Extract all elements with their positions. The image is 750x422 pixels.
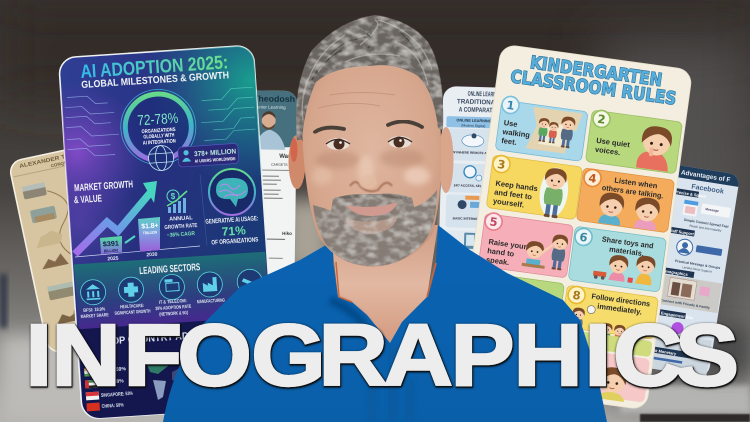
rule 2: quiet voices: Use quiet: [596, 136, 631, 149]
market chart: TRILLION: [143, 230, 157, 235]
card body text: [258, 153, 293, 260]
panel: kindergarten classroom rules card: [455, 44, 693, 410]
parchment title: ALEXANDER THE GREAT: [19, 147, 99, 170]
users stat pill: [178, 143, 239, 167]
feature: engagement: [637, 307, 716, 377]
heading: CLASSROOM RULES: [509, 67, 677, 110]
nose: [350, 175, 392, 191]
rule 4: listen: 4: [588, 171, 597, 186]
rule 6: share toys: materials.: [609, 245, 644, 258]
feature: staff support: Staff Support: [668, 228, 695, 237]
market growth heading: MARKET GROWTH: [74, 179, 133, 194]
column header: [446, 116, 517, 129]
face: [302, 62, 441, 267]
rule 1: walking feet: feet.: [501, 136, 517, 147]
divider line: [200, 174, 207, 246]
heading: AI ADOPTION 2025:: [80, 52, 229, 83]
feature: staff support: Practical Message & Groups: [675, 259, 721, 270]
panel: corporate training infographic card behind: Senior Learning: [254, 104, 286, 110]
year labels: 2025: [107, 256, 119, 262]
feature: engagement: Trust Monetary: [647, 347, 677, 356]
rule 2: quiet voices: voices.: [594, 145, 621, 157]
icon: factory: [197, 271, 223, 298]
adoption ring stat: 72-78%: [137, 111, 179, 129]
icon: brain: [209, 169, 255, 215]
rule 4: listen: Listen when: [614, 176, 658, 190]
icon: globe: [148, 145, 174, 171]
panel: corporate training infographic card behind: [222, 90, 297, 281]
mouth: [346, 202, 398, 216]
feature: speed: Reach and Info Instantly: [689, 224, 722, 233]
rule 2: quiet voices: 2: [597, 112, 606, 127]
sector labels: MARKET SHARE: [81, 312, 109, 320]
generative AI stat: [205, 215, 259, 247]
rule 1: walking feet: Use: [503, 118, 518, 129]
eyebrows: [315, 121, 422, 132]
lower panels: [463, 316, 653, 405]
row: interaction: [445, 194, 510, 229]
rule 3: hands to yourself: Keep hands: [495, 179, 538, 193]
generative AI stat: 71%: [221, 223, 247, 239]
sector labels: HEALTHCARE:: [120, 303, 145, 310]
feature: staff support: [653, 225, 726, 275]
row: tablet: UP-SKILLING: [463, 253, 484, 257]
card body text: War: [279, 154, 291, 160]
feature: demographics: [647, 265, 723, 313]
feature: staff support: Limited Direct Support: [682, 265, 712, 274]
lower navy band: [78, 316, 277, 419]
rule 3: hands to yourself: yourself.: [493, 196, 525, 210]
small arrow: [125, 236, 135, 243]
rule 8: follow directions: [560, 285, 659, 355]
2025 value label: $391: [103, 240, 119, 249]
panel: online vs traditional learning card: (Modern Digital): [461, 124, 485, 128]
card header: [224, 90, 297, 150]
rule 7 panel: [470, 272, 565, 338]
row: accessibility: ANYWHERE REMOTE ACCESS: [450, 150, 498, 156]
rule 4: listen: [576, 168, 675, 233]
feature: speed: Precise & Speed: [674, 189, 707, 199]
2030 value bar: [138, 217, 160, 252]
growth arrow: [75, 181, 157, 254]
country flags: [84, 368, 100, 411]
feature: speed: Simple Content Spread Fast: [684, 218, 730, 229]
rule 4: listen: others are talking.: [601, 183, 664, 200]
rule 5: raise hand: speak.: [486, 255, 510, 267]
panel: advantages of Facebook card: y Advantages of F: [675, 168, 731, 184]
growth rate label: GROWTH RATE: [164, 223, 198, 231]
card heading: TRADITIONAL: [457, 98, 499, 107]
illustrated map stops: [22, 176, 103, 335]
row: tablet: [444, 230, 509, 266]
panel: AI adoption infographic card: [58, 45, 268, 419]
growth rate label: ANNUAL: [169, 215, 193, 223]
row: flexibility: [446, 163, 511, 194]
country labels: SINGAPORE: 53%: [101, 391, 134, 399]
header name: Theodosh: [253, 93, 295, 104]
country labels: UAE: 58%: [100, 378, 124, 386]
neck: [330, 225, 438, 343]
icon: growth coin: $: [171, 192, 176, 201]
face shading: [312, 92, 430, 185]
rule 8: follow directions: immediately.: [597, 301, 642, 316]
panel: AI adoption infographic card: & VALUE: [74, 193, 103, 206]
sector labels: MANUFACTURING: [197, 297, 225, 305]
row: accessibility: [447, 128, 512, 162]
rule 8: follow directions: Follow directions: [591, 292, 651, 309]
rule 3: hands to yourself: [486, 154, 583, 221]
rule 5: raise hand: [478, 212, 574, 278]
market chart: BILLION: [104, 248, 118, 253]
dark header with title: [631, 158, 740, 187]
sectors band: [74, 252, 270, 329]
generative AI stat: GENERATIVE AI USAGE:: [205, 215, 259, 226]
rule 6: share toys: 6: [579, 230, 588, 245]
generative AI stat: OF ORGANIZATIONS: [211, 236, 259, 247]
market chart: [75, 169, 259, 400]
portrait photo: [255, 111, 286, 150]
feature: demographics: Demographics: [660, 268, 689, 277]
card body text: CARGETS: [271, 163, 288, 167]
market chart: 2030: [146, 252, 158, 258]
row: flexibility: 24/7 ACCESS, SELF-PACED: [454, 183, 497, 189]
heading: [509, 51, 680, 110]
sector labels: IT & TELECOM:: [159, 298, 187, 306]
rule 1: walking feet: walking: [501, 127, 531, 140]
sector labels: 38% ADOPTION RATE: [155, 304, 192, 312]
country adoption heading: TOP COUNTRY ADOPTION: [106, 329, 225, 347]
2030 value label: $1.8+: [141, 222, 159, 231]
beard: [313, 190, 437, 266]
rule 5: raise hand: Raise your: [488, 237, 527, 251]
platform name: Facebook: [691, 184, 724, 196]
row: interaction: BASIC INTERNET NEEDED: [453, 216, 494, 221]
world map: [146, 356, 180, 400]
sub-heading: GLOBAL MILESTONES & GROWTH: [81, 70, 229, 91]
rule 5: raise hand: 5: [489, 214, 499, 229]
rule 1: walking feet: 1: [506, 98, 515, 113]
hair: [296, 15, 443, 140]
card heading: [457, 90, 503, 115]
2025 value box: [100, 236, 122, 254]
country labels: CHINA: 58%: [102, 402, 124, 410]
card heading: A COMPARATIVE: [459, 106, 501, 115]
growth rate label: [164, 215, 198, 239]
card body text: Hiko: [282, 231, 292, 236]
country labels: INDIA: 59%: [99, 366, 127, 374]
card heading: ONLINE LEARNING: [468, 91, 503, 99]
sector labels: BFSI: 18.9%: [83, 306, 106, 314]
rule 6: share toys: [568, 226, 667, 292]
title text: INFOGRAPHICS: [26, 307, 739, 404]
eyes: [326, 136, 412, 150]
panel: online vs traditional learning card: [437, 86, 523, 318]
rule 2: quiet voices: [585, 109, 683, 174]
heading: KINDERGARTEN: [529, 53, 663, 91]
circuit decoration left: [64, 94, 120, 158]
feature: speed: Message: [705, 207, 719, 213]
icon: healthcare cross: [118, 276, 144, 303]
icon: IT devices: [159, 274, 185, 300]
icon: retail: [236, 269, 263, 295]
icon: growth coin: [167, 190, 187, 213]
shirt: [163, 225, 607, 422]
country labels: [99, 366, 134, 410]
rule 5: raise hand: hand to: [487, 246, 515, 259]
sector labels: [80, 296, 226, 323]
chart axis: [75, 246, 200, 257]
rule 1: walking feet: [495, 95, 589, 161]
sector labels: SIGNIFICANT GROWTH: [114, 308, 151, 317]
rule 3: hands to yourself: and feet to: [494, 187, 533, 202]
circuit decoration right: [199, 87, 256, 141]
adoption ring stat: [118, 87, 198, 167]
feature: demographics: Connect with Friends & Family: [661, 298, 710, 310]
feature: speed: [660, 186, 734, 234]
rule 8: follow directions: 8: [572, 288, 582, 303]
users stat pill: 378+ MILLION: [194, 148, 236, 158]
icon: bank: [80, 279, 106, 306]
adoption ring stat: ORGANIZATIONS: [141, 127, 176, 135]
growth rate label: ~36% CAGR: [167, 231, 195, 239]
rule 6: share toys: Share toys and: [601, 234, 654, 251]
users stat pill: AI USERS WORLDWIDE: [194, 156, 236, 164]
adoption ring stat: AI INTEGRATION: [143, 138, 176, 147]
adoption ring stat: GLOBALLY WITH: [143, 132, 175, 141]
sector labels: (NETWORK & 5G): [159, 310, 189, 318]
panel: historical parchment infographic card: [8, 141, 147, 354]
leading sectors heading: LEADING SECTORS: [139, 262, 201, 277]
feature: engagement: Tool Engagement Box: [651, 309, 694, 321]
ears: [288, 127, 454, 193]
panel: historical parchment infographic card: CONQUESTS: [50, 158, 79, 168]
person: [163, 15, 607, 422]
rule 3: hands to yourself: 3: [497, 157, 506, 172]
panel: online vs traditional learning card: ONLINE LEARNING: [456, 118, 492, 123]
panel: advantages of Facebook card: [600, 158, 740, 377]
